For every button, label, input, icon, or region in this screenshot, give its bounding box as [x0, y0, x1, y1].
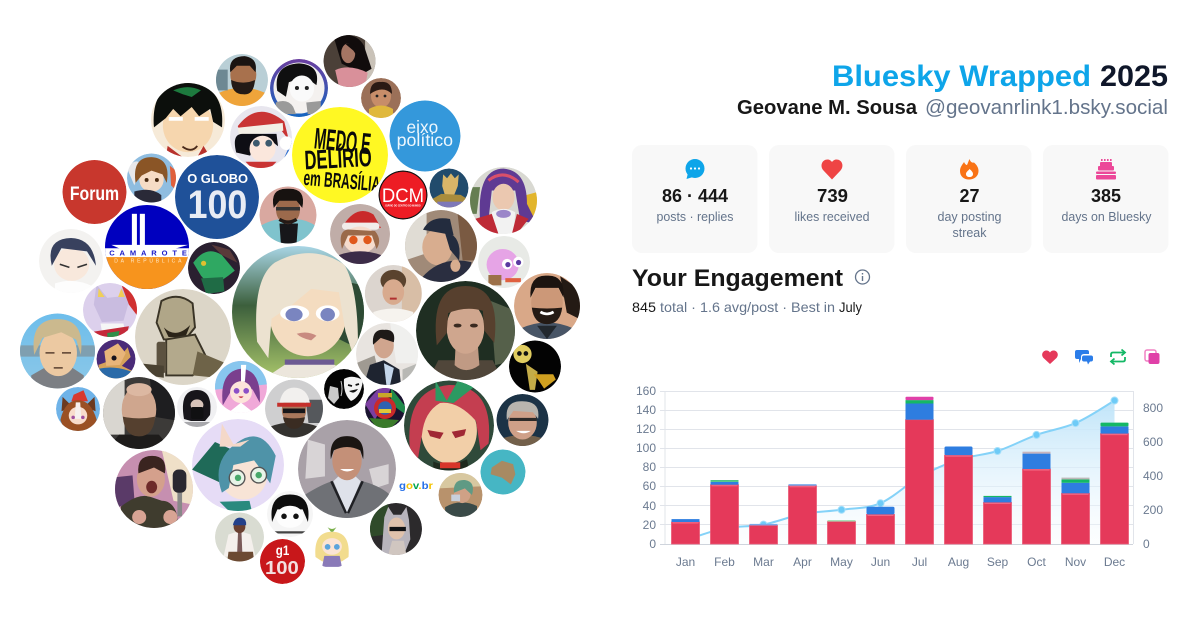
engagement summary: July	[839, 299, 862, 315]
avatar: logo DCM	[378, 170, 428, 220]
y axis left labels: 40	[643, 499, 656, 513]
panel: posts and replies	[632, 145, 758, 253]
avatar: woman purple cosplay	[470, 167, 537, 234]
user name and handle	[737, 97, 1168, 119]
avatar: logo Camarote da República	[105, 205, 189, 290]
user name and handle: @geovanrlink1.bsky.social	[925, 97, 1168, 119]
avatar: woman dark hair	[324, 35, 376, 87]
x axis month labels: May	[830, 555, 853, 569]
y axis left labels: 160	[636, 384, 656, 398]
panel: likes received: 739	[817, 186, 848, 206]
avatar: man orange shirt	[216, 54, 268, 106]
stacked bars	[672, 397, 1128, 544]
avatar: podcaster with microphone	[115, 450, 193, 528]
avatar: older man glasses	[496, 394, 548, 446]
avatar: anime man sketch	[39, 229, 103, 293]
avatar: silver hair sunglasses	[370, 503, 422, 555]
bar: Jun	[866, 507, 894, 544]
x axis month labels: Feb	[714, 555, 735, 569]
icon: flame	[960, 159, 978, 180]
x axis month labels: Mar	[753, 555, 774, 569]
avatar: logo Forum	[62, 160, 126, 224]
avatar: santa chibi girl	[330, 204, 390, 264]
avatar bubble cluster	[20, 35, 580, 584]
x axis month labels: Jan	[676, 555, 695, 569]
title: 2025	[1100, 60, 1168, 93]
x axis month labels: Jul	[912, 555, 927, 569]
y axis left labels	[636, 384, 656, 551]
panel: day posting streak: day posting	[938, 210, 1002, 224]
bar: Dec	[1100, 423, 1128, 544]
icon: quotes	[1145, 350, 1160, 364]
engagement summary: total · 1.6 avg/post · Best in	[660, 299, 835, 315]
avatar: llama art	[96, 340, 136, 378]
icon: like	[1042, 350, 1058, 364]
x axis month labels	[676, 555, 1125, 569]
avatar: masked person	[177, 387, 217, 427]
y axis left labels: 100	[636, 441, 656, 455]
icon: cake	[1096, 159, 1116, 180]
bar and line chart	[636, 384, 1163, 569]
avatar: man with glasses	[260, 186, 316, 244]
icon: heart	[822, 160, 842, 180]
panel: likes received	[769, 145, 894, 253]
text logo: gov.br: gov.br	[399, 481, 433, 492]
avatar: ringed manga girl	[270, 59, 328, 117]
avatar: pink blob character	[478, 236, 530, 288]
avatar: theatre masks	[324, 369, 364, 409]
avatar: logo O Globo 100	[175, 155, 259, 239]
panel: days on Bluesky: days on Bluesky	[1062, 210, 1152, 224]
icon: chat bubble	[686, 159, 704, 179]
avatar: bw manga girl	[267, 491, 313, 537]
avatar: anime man with cap	[405, 210, 477, 282]
x axis month labels: Apr	[793, 555, 812, 569]
panel: day posting streak: streak	[952, 226, 987, 240]
avatar: smiling bearded man	[514, 273, 580, 339]
avatar: man red cap sunglasses	[265, 380, 323, 438]
bar: Sep	[984, 496, 1012, 544]
avatar: skeleton trumpet	[509, 340, 561, 392]
panel: days on Bluesky: 385	[1091, 186, 1121, 206]
avatar: anime brown hair	[127, 154, 176, 202]
avatar: young man brunette	[416, 281, 515, 380]
x axis month labels: Oct	[1027, 555, 1046, 569]
bar: Nov	[1062, 478, 1090, 544]
panel: day posting streak	[906, 145, 1032, 253]
avatar: woman curly hair	[365, 265, 422, 322]
avatar: man in suit blue	[356, 323, 418, 385]
chart legend icons	[1042, 350, 1160, 364]
avatar: golden king art	[430, 168, 468, 208]
avatar: cat art	[83, 283, 137, 337]
avatar: big anime white hair	[232, 246, 364, 378]
avatar: teal with cat photo	[480, 450, 526, 494]
panel: posts and replies: posts · replies	[656, 210, 734, 224]
avatar: anime santa hat girl	[230, 106, 293, 168]
y axis left labels: 140	[636, 403, 656, 417]
icon: replies	[1075, 350, 1093, 364]
user name and handle: Geovane M. Sousa	[737, 97, 918, 119]
icon: reposts	[1111, 350, 1125, 364]
icon: info	[856, 270, 870, 284]
title: Bluesky Wrapped	[832, 60, 1091, 93]
y axis right labels	[1143, 401, 1163, 551]
heading: Your Engagement: Your Engagement	[632, 265, 843, 292]
cumulative area and line	[686, 397, 1118, 544]
bar: Aug	[944, 446, 972, 544]
avatar: man in hat and tie	[215, 512, 264, 562]
engagement summary: 845	[632, 299, 656, 315]
avatar: godzilla sketch	[135, 289, 231, 385]
avatar: logo g1 100	[260, 539, 305, 584]
bar: Oct	[1022, 452, 1050, 544]
avatar: boy green hair	[438, 473, 482, 517]
avatar: pink anime horse girl	[215, 361, 267, 413]
avatar: bald man beard	[103, 377, 175, 449]
bar: Jul	[906, 397, 934, 544]
avatar: wizard teal anime	[192, 419, 284, 511]
avatar: man in grey cardigan	[298, 420, 396, 518]
y axis left labels: 0	[649, 537, 656, 551]
avatar: blond man anime	[20, 314, 95, 388]
x axis month labels: Sep	[987, 555, 1008, 569]
avatar: green crocodile art	[188, 242, 240, 294]
avatar: anime green hair	[151, 83, 225, 157]
y axis right labels: 400	[1143, 469, 1163, 483]
avatar: blonde chibi	[310, 524, 354, 568]
panel: days on Bluesky	[1043, 145, 1168, 253]
y axis left labels: 80	[643, 460, 656, 474]
bar: Jan	[672, 519, 700, 544]
y axis left labels: 60	[643, 479, 656, 493]
avatar: logo eixo político	[390, 100, 460, 172]
avatar: logo Medo e Delírio em Brasília	[292, 107, 388, 203]
y axis right labels: 200	[1143, 503, 1163, 517]
x axis month labels: Aug	[948, 555, 969, 569]
y axis right labels: 0	[1143, 537, 1150, 551]
bar: Feb	[710, 480, 738, 544]
y axis right labels: 800	[1143, 401, 1163, 415]
bar: May	[828, 520, 856, 544]
bar: Apr	[788, 484, 816, 544]
x axis month labels: Dec	[1104, 555, 1125, 569]
y axis right labels: 600	[1143, 435, 1163, 449]
y axis left labels: 120	[636, 422, 656, 436]
panel: posts and replies: 86 · 444	[662, 186, 728, 206]
avatar: red hair anime	[404, 380, 494, 470]
panel: likes received: likes received	[794, 210, 870, 224]
panel: day posting streak: 27	[960, 186, 980, 206]
avatar: horse-eared girl santa	[56, 387, 100, 431]
y axis left labels: 20	[643, 518, 656, 532]
x axis month labels: Nov	[1065, 555, 1086, 569]
bar: Mar	[750, 524, 778, 544]
avatar: child	[361, 78, 401, 118]
avatar: colorful emblem	[365, 388, 405, 428]
x axis month labels: Jun	[871, 555, 890, 569]
